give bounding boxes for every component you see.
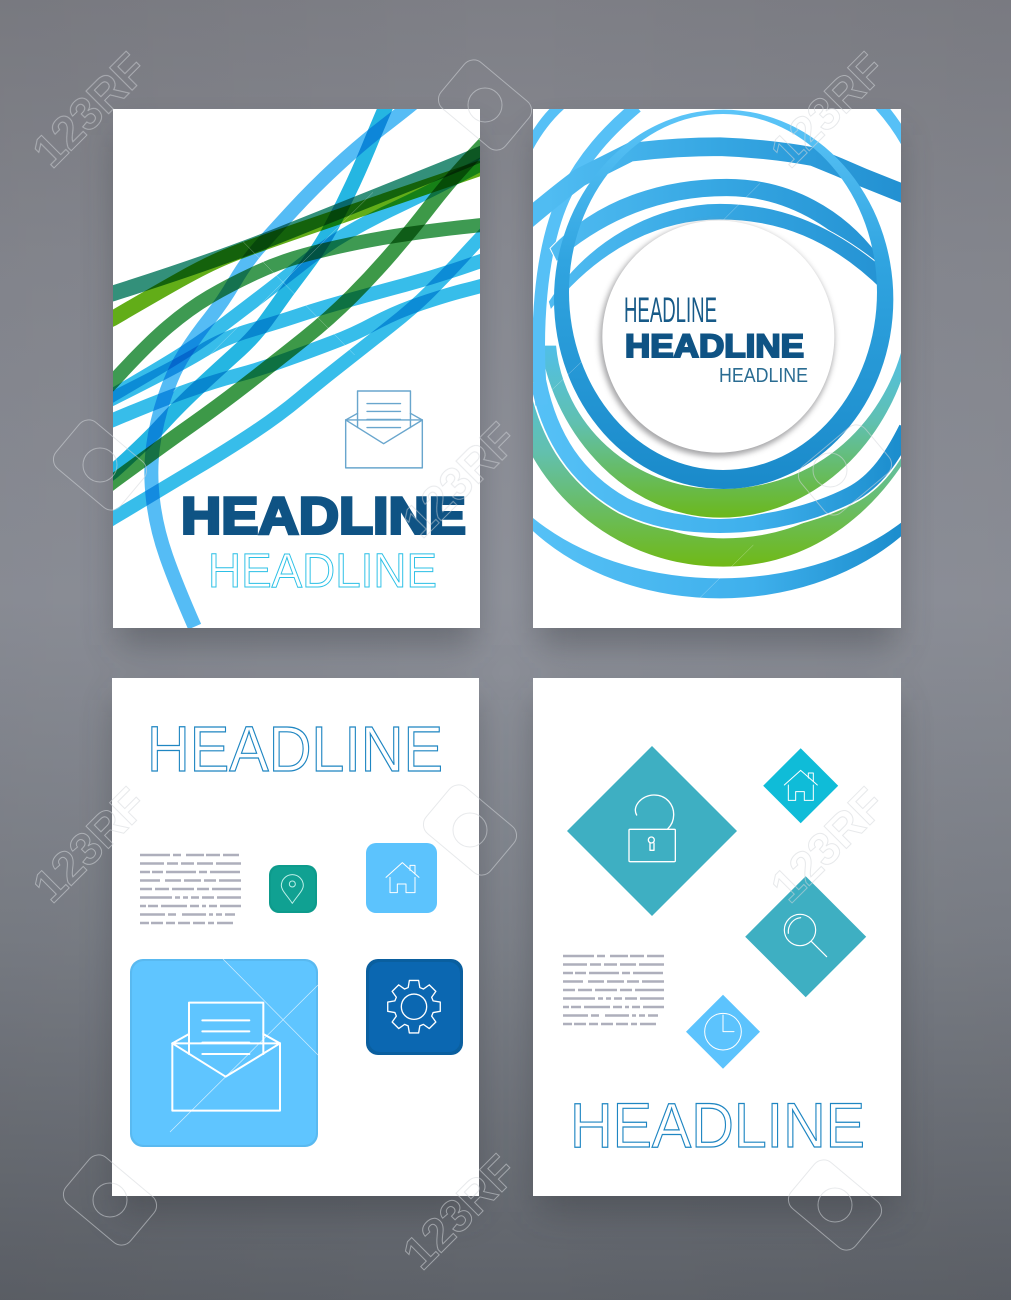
watermarks: 123RF: [760, 778, 895, 912]
heading: bold headline: HEADLINE: [625, 328, 804, 364]
main ring: [554, 110, 893, 489]
icon diamond: home: [763, 748, 838, 823]
placeholder text block: [563, 956, 664, 1024]
light ring upper left: [539, 107, 637, 405]
panel: ribbons flyer: [106, 102, 490, 628]
panel: rings flyer: [533, 109, 901, 628]
icon diamond: search: [745, 876, 866, 997]
heading: bold headline: HEADLINE: [181, 488, 466, 546]
icon tile: envelope: [130, 959, 318, 1147]
outer bottom ring: [533, 518, 901, 598]
outer green band: [532, 358, 908, 567]
ring artwork: [533, 109, 901, 598]
icon: open envelope: [346, 391, 422, 468]
watermarks: 123RF: [22, 778, 157, 912]
watermarks: 123RF: [392, 1145, 527, 1279]
heading: outline headline: HEADLINE: [147, 713, 443, 785]
icon diamond: open lock: [567, 746, 737, 916]
white circle: [602, 221, 834, 453]
placeholder text block: [140, 855, 241, 923]
top band 2: [549, 178, 874, 261]
icon diamond: clock: [686, 995, 760, 1069]
watermarks: 123RF: [392, 413, 527, 547]
heading: small headline: HEADLINE: [719, 365, 808, 387]
heading: thin headline: HEADLINE: [624, 291, 717, 330]
inner green band: [540, 332, 905, 518]
watermarks: 123RF: [760, 43, 895, 177]
corner arcs: [533, 109, 901, 150]
top band 3: [548, 203, 883, 310]
circle shadow: [600, 222, 834, 457]
ribbon artwork: [106, 102, 490, 627]
heading: outline headline: HEADLINE: [570, 1091, 865, 1161]
panel: icon tiles flyer: [112, 678, 479, 1196]
light ring lower: [538, 382, 907, 525]
icon tile: gear: [366, 959, 463, 1055]
watermarks: 123RF: [22, 43, 157, 177]
heading: outline headline: HEADLINE: [208, 545, 437, 598]
icon tile: home: [366, 843, 437, 913]
panel: diamonds flyer: [533, 678, 901, 1196]
icon tile: map pin: [269, 865, 317, 913]
top band 1: [527, 147, 907, 220]
panel shadows: [117, 135, 896, 1212]
